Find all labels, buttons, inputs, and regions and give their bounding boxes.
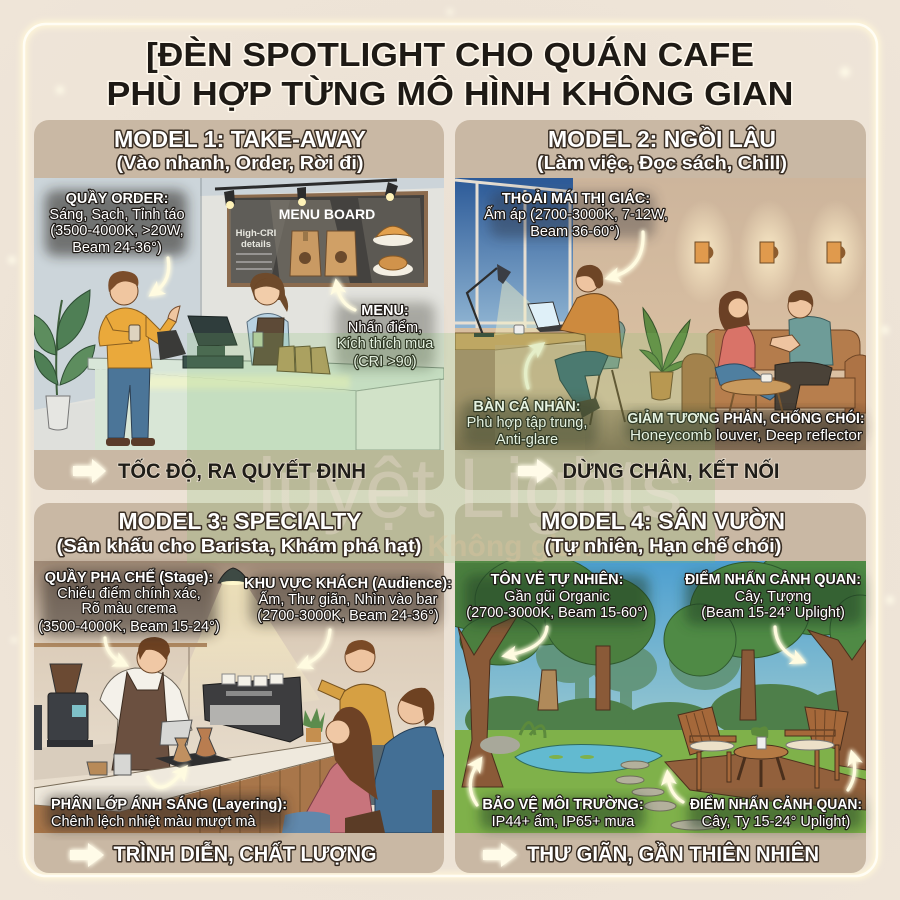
labels scene 1: (CRI >90) <box>353 354 417 370</box>
panel 3 heading: MODEL 3: SPECIALTY <box>118 508 362 534</box>
labels scene 4: TÔN VẺ TỰ NHIÊN: <box>491 570 623 588</box>
arrows scene 2 <box>526 232 643 388</box>
panel 4 heading <box>541 507 785 556</box>
labels scene 3: Chiếu điểm chính xác, <box>57 586 201 602</box>
labels scene 4: Cây, Tượng <box>735 589 811 605</box>
barista <box>100 637 192 770</box>
sofa <box>682 330 866 413</box>
panel 1 heading <box>114 126 366 173</box>
labels scene 3: Rõ màu crema <box>81 601 177 617</box>
labels scene 4: Gần gũi Organic <box>504 589 610 605</box>
arrows scene 4 <box>470 627 855 805</box>
labels scene 2: Honeycomb louver, Deep reflector <box>630 428 862 444</box>
panel 1 heading: (Vào nhanh, Order, Rời đi) <box>116 153 364 173</box>
watermark tint <box>187 333 715 563</box>
labels scene 2: Beam 36-60°) <box>530 224 620 240</box>
menu board: MENU BOARD <box>279 206 375 222</box>
pond <box>480 722 662 773</box>
coffee bags on counter <box>277 346 330 374</box>
espresso machine <box>203 674 303 742</box>
panel: model 1 take-away <box>33 120 444 490</box>
labels scene 2: Ấm áp (2700-3000K, 7-12W, <box>484 206 668 223</box>
title: PHÙ HỢP TỪNG MÔ HÌNH KHÔNG GIAN <box>106 74 794 112</box>
labels scene 3: QUẦY PHA CHẾ (Stage): <box>45 569 213 586</box>
labels scene 1: QUẦY ORDER: <box>66 190 168 207</box>
scene: garden <box>420 545 890 833</box>
panel 2 heading: MODEL 2: NGỒI LÂU <box>548 125 776 152</box>
counter <box>34 741 350 833</box>
panel: model 2 ngồi lâu <box>455 120 866 490</box>
title <box>106 36 794 112</box>
panel 3 heading: (Sân khấu cho Barista, Khám phá hạt) <box>56 536 422 556</box>
labels scene 4: ĐIỂM NHẤN CẢNH QUAN: <box>690 795 862 813</box>
labels scene 2 <box>462 190 864 448</box>
brewing set <box>87 728 232 775</box>
panel 3 background <box>34 503 444 873</box>
panel 2 heading <box>537 125 787 173</box>
wall sconces <box>680 209 861 294</box>
panel 1 heading: MODEL 1: TAKE-AWAY <box>114 126 366 152</box>
panel 3 takeaway: TRÌNH DIỄN, CHẤT LƯỢNG <box>114 843 376 866</box>
labels scene 4: ĐIỂM NHẤN CẢNH QUAN: <box>685 570 861 588</box>
labels scene 4: Cây, Ty 15-24° Uplight) <box>702 814 850 830</box>
guest in yellow <box>318 640 395 805</box>
labels scene 2: THOẢI MÁI THỊ GIÁC: <box>502 190 650 207</box>
scene: take-away counter <box>33 178 444 450</box>
labels scene 4: IP44+ ẩm, IP65+ mưa <box>492 814 635 830</box>
canopy left <box>420 550 655 665</box>
guest in pink <box>282 707 385 833</box>
labels scene 1: (3500-4000K, >20W, <box>50 223 184 239</box>
plant <box>640 308 690 400</box>
man at laptop <box>555 265 622 418</box>
labels scene 3: KHU VỰC KHÁCH (Audience): <box>244 575 452 592</box>
counter <box>88 358 444 450</box>
panel 4 background <box>455 503 866 873</box>
distant trees <box>536 627 741 710</box>
scene: lounge <box>455 178 866 450</box>
panel 1 takeaway: TỐC ĐỘ, RA QUYẾT ĐỊNH <box>118 459 366 483</box>
title: [ĐÈN SPOTLIGHT CHO QUÁN CAFE <box>146 36 754 73</box>
labels scene 3: Ấm, Thư giãn, Nhìn vào bar <box>259 591 438 608</box>
menu board: details <box>241 239 271 250</box>
desk <box>455 333 590 450</box>
labels scene 3: (2700-3000K, Beam 24-36°) <box>257 608 439 624</box>
labels scene 2: BÀN CÁ NHÂN: <box>473 397 581 415</box>
labels scene 2: Phù hợp tập trung, <box>467 415 587 431</box>
shrub line <box>465 684 880 750</box>
barista <box>247 273 290 365</box>
labels scene 2: GIẢM TƯƠNG PHẢN, CHỐNG CHÓI: <box>628 409 864 427</box>
labels scene 1: Nhấn điểm, <box>348 320 422 336</box>
menu board: High-CRI <box>236 228 276 239</box>
labels scene 3: Chênh lệch nhiệt màu mượt mà <box>51 814 257 830</box>
panel: model 4 sân vườn <box>455 503 872 873</box>
labels scene 3 <box>38 569 452 830</box>
guest in blue <box>375 688 445 833</box>
lawn <box>455 730 866 833</box>
customer <box>99 271 180 446</box>
grinder <box>34 664 93 750</box>
ceiling lamp and beam <box>34 568 310 720</box>
panel 4 takeaway: THƯ GIÃN, GẦN THIÊN NHIÊN <box>527 842 819 866</box>
garden chairs and table <box>678 707 848 790</box>
labels scene 1 <box>45 190 435 370</box>
plant <box>33 290 95 430</box>
chair <box>585 321 625 425</box>
coffee table <box>721 374 791 420</box>
window <box>455 178 575 328</box>
desk lamp <box>466 264 540 337</box>
panel 2 background <box>455 120 866 490</box>
panel 2 heading: (Làm việc, Đọc sách, Chill) <box>537 153 787 173</box>
labels scene 2: Anti-glare <box>496 432 558 448</box>
product bags on board <box>290 231 357 276</box>
panel: model 3 specialty <box>34 503 452 873</box>
scene: specialty bar <box>34 561 446 833</box>
labels scene 1: Beam 24-36°) <box>72 240 162 256</box>
arrows scene 3 <box>105 630 330 787</box>
track lights <box>215 180 398 209</box>
stepping stones <box>616 761 719 830</box>
watermark text: Không gian <box>428 530 592 563</box>
panel 1 background <box>34 120 444 490</box>
trunks <box>458 615 866 787</box>
laptop and mug <box>514 302 570 334</box>
watermark text: luyệt Lights <box>258 441 682 535</box>
back counter <box>34 744 132 780</box>
menu board <box>227 191 428 287</box>
labels scene 3: PHÂN LỚP ÁNH SÁNG (Layering): <box>51 795 287 813</box>
labels scene 4: (Beam 15-24° Uplight) <box>701 605 845 621</box>
panel 4 heading: MODEL 4: SÂN VƯỜN <box>541 507 785 534</box>
arrows scene 1 <box>155 258 355 310</box>
man on sofa <box>770 290 833 410</box>
labels scene 1: Sáng, Sạch, Tỉnh táo <box>49 207 185 223</box>
labels scene 1: MENU: <box>361 303 409 319</box>
woman on sofa <box>715 291 780 400</box>
pastries on board <box>373 226 413 276</box>
plant on bar <box>303 708 325 742</box>
canopy right <box>664 545 890 676</box>
panel 3 heading <box>56 508 422 556</box>
labels scene 4: (2700-3000K, Beam 15-60°) <box>466 605 648 621</box>
labels scene 3: (3500-4000K, Beam 15-24°) <box>38 619 220 635</box>
labels scene 4 <box>465 570 863 830</box>
panel 4 heading: (Tự nhiên, Hạn chế chói) <box>544 536 782 556</box>
labels scene 4: BẢO VỆ MÔI TRƯỜNG: <box>482 795 644 813</box>
labels scene 1: Kích thích mua <box>337 336 434 352</box>
wooden deck <box>665 752 866 810</box>
pos terminal <box>157 316 243 368</box>
panel 2 takeaway: DỪNG CHÂN, KẾT NỐI <box>562 459 780 483</box>
